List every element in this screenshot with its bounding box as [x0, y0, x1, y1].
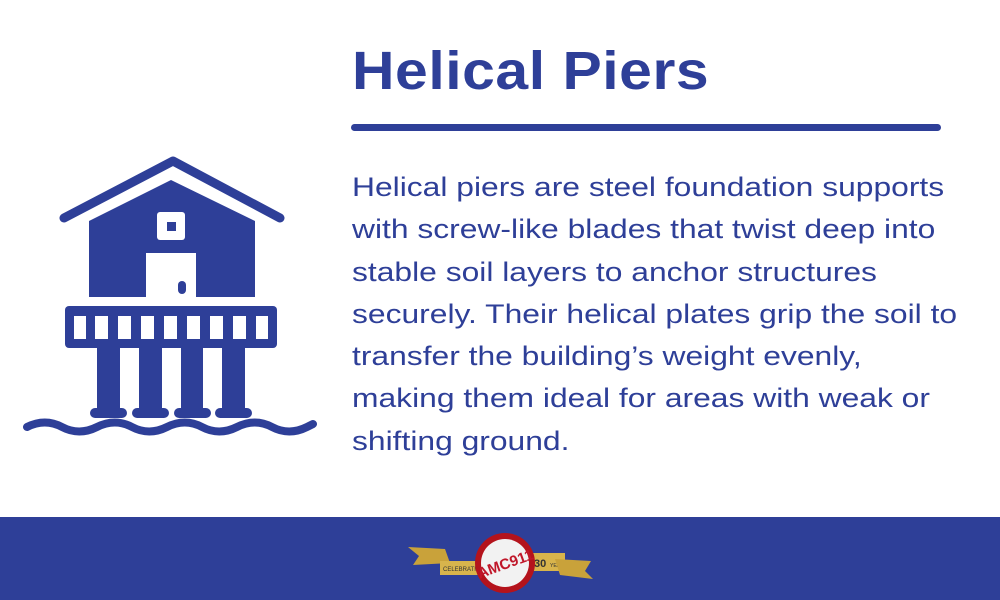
description text: transfer the building’s weight evenly,	[352, 341, 862, 371]
description text: with screw-like blades that twist deep into	[352, 214, 935, 244]
divider rule	[351, 124, 941, 131]
logo: AMC911 30 years: CELEBRATING	[443, 567, 485, 573]
logo: AMC911 30 years: YEARS	[550, 563, 568, 569]
description text	[352, 172, 957, 456]
footer band	[0, 517, 1000, 600]
logo: AMC911 30 years	[408, 533, 593, 593]
description text: making them ideal for areas with weak or	[352, 383, 930, 413]
description text: shifting ground.	[352, 426, 569, 456]
logo: AMC911 30 years: 30	[534, 558, 546, 570]
description text: stable soil layers to anchor structures	[352, 257, 877, 287]
description text: securely. Their helical plates grip the soil to	[352, 299, 957, 329]
description text: Helical piers are steel foundation supports	[352, 172, 944, 202]
icon: house on piers	[23, 156, 317, 436]
logo: AMC911 30 years: AMC911	[475, 546, 536, 582]
title: Helical Piers	[352, 41, 709, 101]
